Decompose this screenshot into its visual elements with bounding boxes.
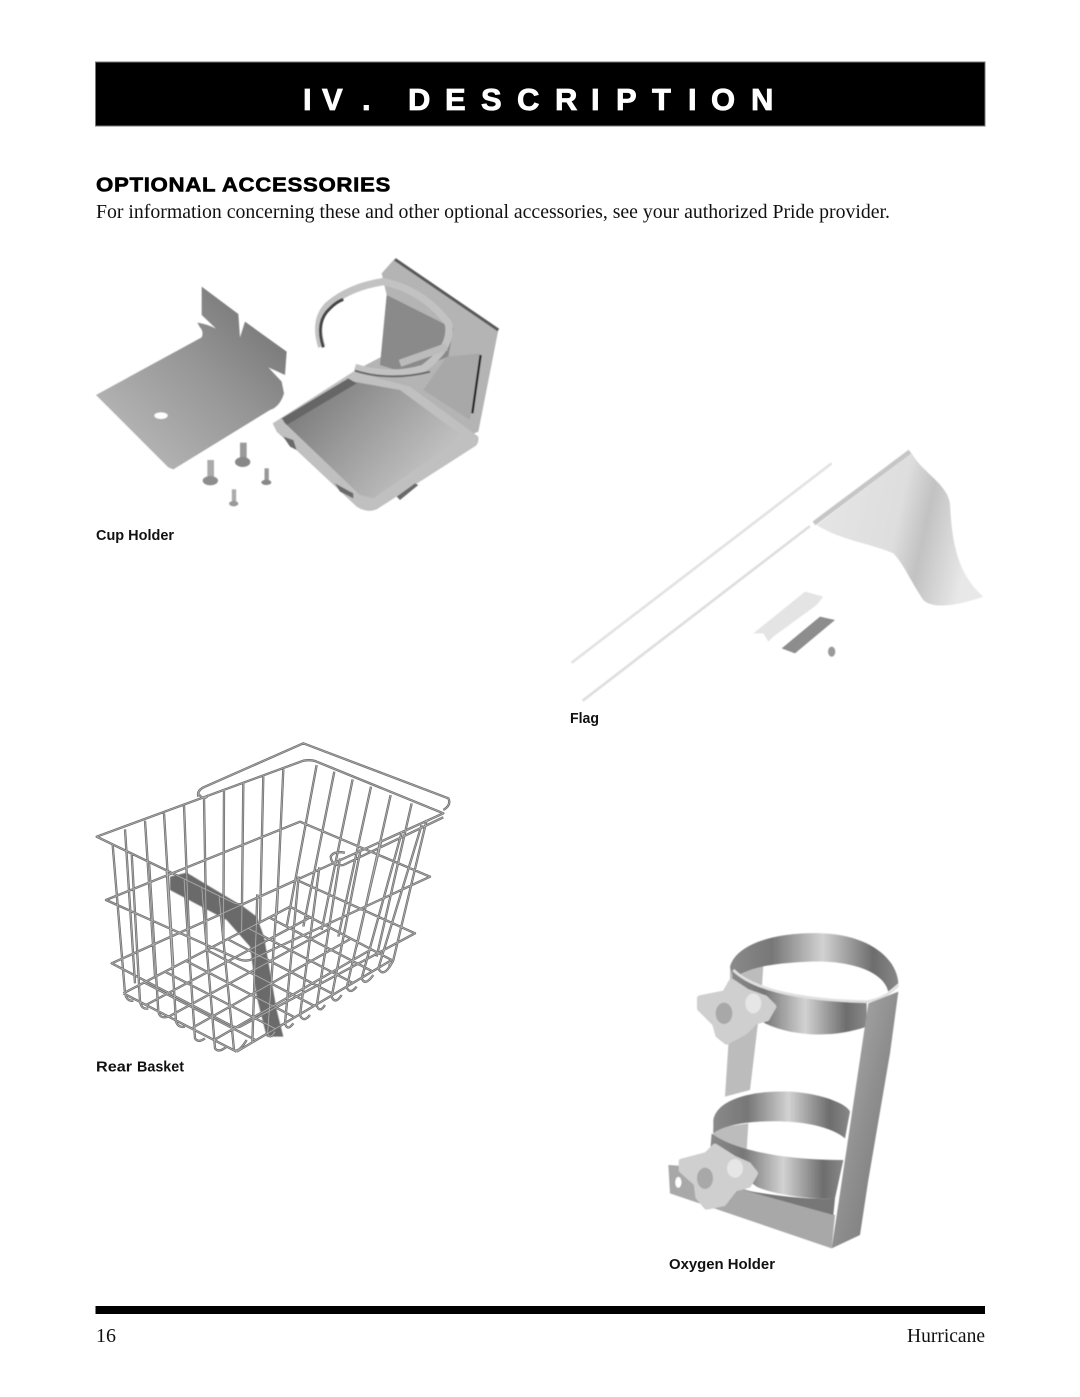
footer rule xyxy=(96,1306,985,1314)
heading: optional accessories: OPTIONAL ACCESSORIES xyxy=(96,174,391,196)
caption: flag: Flag xyxy=(570,711,599,727)
footer model name: Hurricane xyxy=(907,1325,985,1347)
header title: I V . D E S C R I P T I O N xyxy=(303,82,773,117)
caption: oxygen holder: Oxygen Holder xyxy=(669,1257,775,1273)
icon: oxygen holder xyxy=(668,933,898,1248)
icon: cup holder xyxy=(96,258,498,511)
icon: flag xyxy=(572,452,983,701)
icon: rear basket xyxy=(97,743,449,1052)
caption: rear basket: Rear xyxy=(96,1060,132,1076)
section header bar xyxy=(96,62,985,126)
caption: cup holder: Cup Holder xyxy=(96,528,174,544)
caption: rear basket: Basket xyxy=(137,1060,184,1076)
page number: 16 xyxy=(96,1325,116,1347)
intro paragraph: For information concerning these and other optional accessories, see your authorized Pride provider. xyxy=(96,201,890,223)
